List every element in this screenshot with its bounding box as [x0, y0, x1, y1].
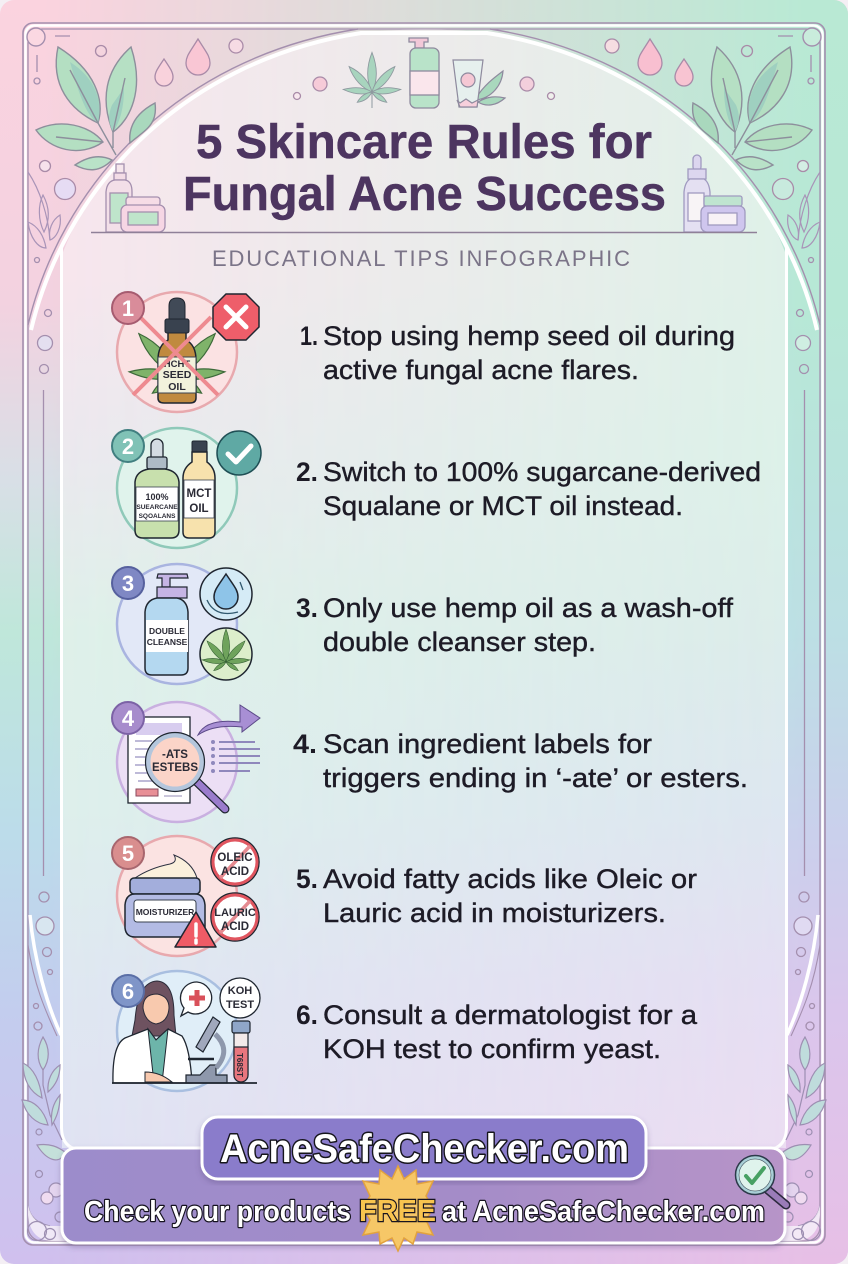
rule 1 icon: no hemp seed oil: HCHT: [164, 359, 190, 370]
rule 2 text: Switch to 100% sugarcane-derived: [323, 457, 761, 487]
rule 3 icon: double cleanse: CLEANSE: [147, 637, 188, 647]
rule 4 icon: ingredient scan: ESTEBS: [152, 762, 198, 774]
rule 1 icon: no hemp seed oil: OIL: [168, 381, 186, 393]
rule 6 icon: dermatologist and KOH test: 6: [122, 979, 134, 1004]
icon: top hemp leaf: [343, 52, 401, 108]
side leaves left: [28, 172, 60, 248]
rule 3 text: [296, 593, 734, 657]
corner foliage top right: [693, 47, 812, 170]
footer call to action: [84, 1193, 765, 1228]
rule 6 text: Consult a dermatologist for a: [323, 1000, 698, 1030]
icon: top tube with leaves: [453, 60, 505, 107]
rule 1 text: 1.: [300, 321, 318, 351]
rule 3 icon: double cleanse: 3: [122, 571, 134, 596]
rule 4 text: triggers ending in ‘-ate’ or esters.: [323, 763, 748, 793]
footer call to action: at AcneSafeChecker.com: [442, 1196, 765, 1228]
footer call to action: Check your products: [84, 1196, 351, 1228]
rule 6 icon: dermatologist and KOH test: KOH: [228, 985, 252, 997]
rule 6 text: [296, 1000, 698, 1064]
rule 3 icon: double cleanse: DOUBLE: [149, 626, 185, 636]
rule 1 icon: no hemp seed oil: SEED: [163, 369, 192, 381]
title: Fungal Acne Success: [183, 168, 666, 221]
website pill: AcneSafeChecker.com: [220, 1127, 629, 1171]
rule 2 icon: squalane and MCT: 2: [122, 434, 134, 459]
rule 5 icon: moisturizer warning: ACID: [221, 921, 249, 933]
rule 3 text: double cleanser step.: [323, 627, 596, 657]
website pill: [202, 1117, 646, 1179]
rule 2 icon: squalane and MCT: [112, 428, 261, 548]
rule 2 icon: squalane and MCT: MCT: [187, 488, 211, 500]
rule 6 icon: dermatologist and KOH test: TEST: [226, 999, 254, 1011]
icon: magnifier with check: [737, 1157, 786, 1205]
bottom foliage right: [768, 1037, 826, 1241]
rule 5 icon: moisturizer warning: [112, 836, 259, 956]
subtitle: EDUCATIONAL TIPS INFOGRAPHIC: [212, 246, 630, 271]
rule 6 text: KOH test to confirm yeast.: [323, 1034, 661, 1064]
rule 1 icon: no hemp seed oil: 1: [122, 296, 134, 321]
droplets and bubbles: [40, 39, 808, 200]
rule 3 text: Only use hemp oil as a wash-off: [323, 593, 734, 623]
title: [183, 116, 666, 221]
rule 5 icon: moisturizer warning: 5: [122, 841, 134, 866]
rule 5 icon: moisturizer warning: OLEIC: [217, 852, 253, 864]
rule 4 icon: ingredient scan: [112, 702, 260, 822]
rule 4 icon: ingredient scan: -ATS: [162, 749, 188, 761]
rule 6 icon: dermatologist and KOH test: [112, 971, 260, 1091]
footer band: [62, 1148, 785, 1243]
rule 3 text: 3.: [296, 593, 318, 623]
title: 5 Skincare Rules for: [196, 116, 652, 169]
rule 4 text: 4.: [293, 729, 317, 759]
divider shelf line: [91, 232, 757, 234]
rule 3 icon: double cleanse: [112, 564, 252, 684]
rule 2 text: 2.: [296, 457, 318, 487]
icon: left shelf bottle and jar: [106, 164, 165, 232]
starburst badge: [363, 1166, 433, 1251]
rule 4 icon: ingredient scan: 4: [122, 706, 135, 731]
rule 2 icon: squalane and MCT: 100%: [145, 492, 169, 502]
rule 2 icon: squalane and MCT: OIL: [189, 503, 209, 515]
rule 5 text: Avoid fatty acids like Oleic or: [323, 864, 697, 894]
rule 1 icon: no hemp seed oil: [112, 292, 259, 412]
icon: top pump bottle: [409, 38, 439, 108]
rule 1 text: active fungal acne flares.: [323, 355, 639, 385]
rule 5 text: Lauric acid in moisturizers.: [323, 898, 666, 928]
icon: right shelf bottle and jar: [684, 155, 745, 232]
rule 2 text: [296, 457, 761, 521]
rule 2 text: Squalane or MCT oil instead.: [323, 491, 683, 521]
rule 5 text: 5.: [296, 864, 318, 894]
footer call to action: FREE: [359, 1193, 436, 1228]
rule 5 icon: moisturizer warning: MOISTURIZER: [136, 907, 194, 917]
rule 2 icon: squalane and MCT: SUEARCANE: [136, 504, 178, 511]
rule 1 text: Stop using hemp seed oil during: [323, 321, 735, 351]
rule 4 text: Scan ingredient labels for: [323, 729, 652, 759]
side leaves right: [788, 172, 820, 248]
corner foliage top left: [36, 47, 155, 170]
rule 1 text: [300, 321, 735, 385]
bottom foliage left: [22, 1037, 80, 1241]
rule 5 icon: moisturizer warning: ACID: [221, 866, 249, 878]
rule 4 text: [293, 729, 748, 793]
rule 6 text: 6.: [296, 1000, 318, 1030]
rule 5 icon: moisturizer warning: LAURIC: [214, 907, 256, 919]
rule 6 icon: dermatologist and KOH test: T68ST: [235, 1053, 244, 1077]
rule 2 icon: squalane and MCT: SQOALANS: [139, 513, 176, 520]
rule 5 text: [296, 864, 697, 928]
panel: main arched background: [62, 30, 786, 1148]
